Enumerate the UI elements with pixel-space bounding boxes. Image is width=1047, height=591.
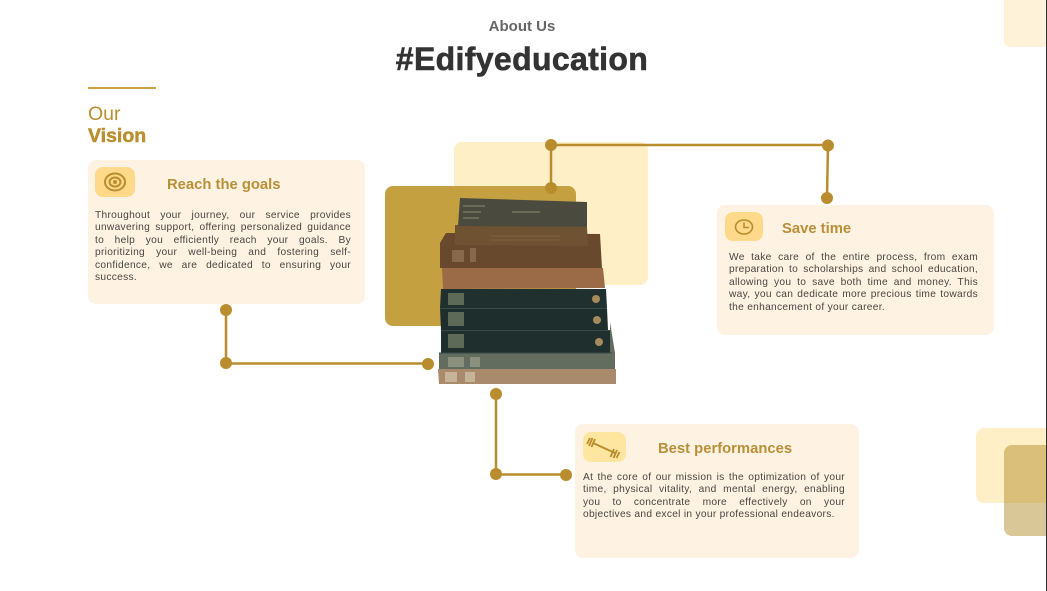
body text: success. <box>95 272 137 283</box>
body text: objectives and excel in your professional endeavors. <box>583 509 835 520</box>
body text: Throughout your journey, our service provides <box>95 210 351 221</box>
body text: We take care of the entire process, from exam <box>729 252 978 263</box>
body text <box>729 252 978 313</box>
card: Save time <box>717 205 994 335</box>
title: #Edifyeducation <box>396 41 648 77</box>
card: Best performances <box>575 424 859 558</box>
body text: way, you can dedicate more precious time towards <box>729 289 978 300</box>
heading rule <box>88 87 156 89</box>
heading: Save time <box>782 221 851 237</box>
page edge line <box>1046 0 1047 591</box>
body text: preparation to scholarships and school education, <box>729 264 978 275</box>
backdrop square: light <box>454 142 648 285</box>
body text: to help you efficiently reach your goals. By <box>95 235 351 246</box>
body text: unwavering support, offering personalized guidance <box>95 222 351 233</box>
heading: Best performances <box>658 441 792 457</box>
body text: time, physical vitality, and mental energy, enabling <box>583 484 845 495</box>
body text: At the core of our mission is the optimization of your <box>583 472 845 483</box>
heading: Our Vision: Our <box>88 103 121 125</box>
body text: prioritizing your well-being and fostering self- <box>95 247 351 258</box>
decorative block: top right <box>1004 0 1047 47</box>
icon: target <box>95 167 135 197</box>
heading: Our Vision: Vision <box>88 124 146 146</box>
eyebrow: About Us: About Us <box>489 18 555 35</box>
body text <box>583 472 845 520</box>
body text: you to concentrate more effectively on your <box>583 497 845 508</box>
heading: Reach the goals <box>167 177 280 193</box>
heading: Our Vision <box>88 103 146 146</box>
icon: dumbbell <box>583 432 626 462</box>
card: Reach the goals <box>88 160 365 304</box>
body text: confidence, we are dedicated to ensuring your <box>95 260 351 271</box>
backdrop square: dark <box>385 186 576 326</box>
body text: the enhancement of your career. <box>729 302 885 313</box>
body text <box>95 210 351 283</box>
decorative block: bottom right dark <box>1004 445 1047 536</box>
decorative block: bottom right light <box>976 428 1047 503</box>
icon: clock <box>725 212 763 241</box>
body text: allowing you to save both time and money. This <box>729 277 978 288</box>
